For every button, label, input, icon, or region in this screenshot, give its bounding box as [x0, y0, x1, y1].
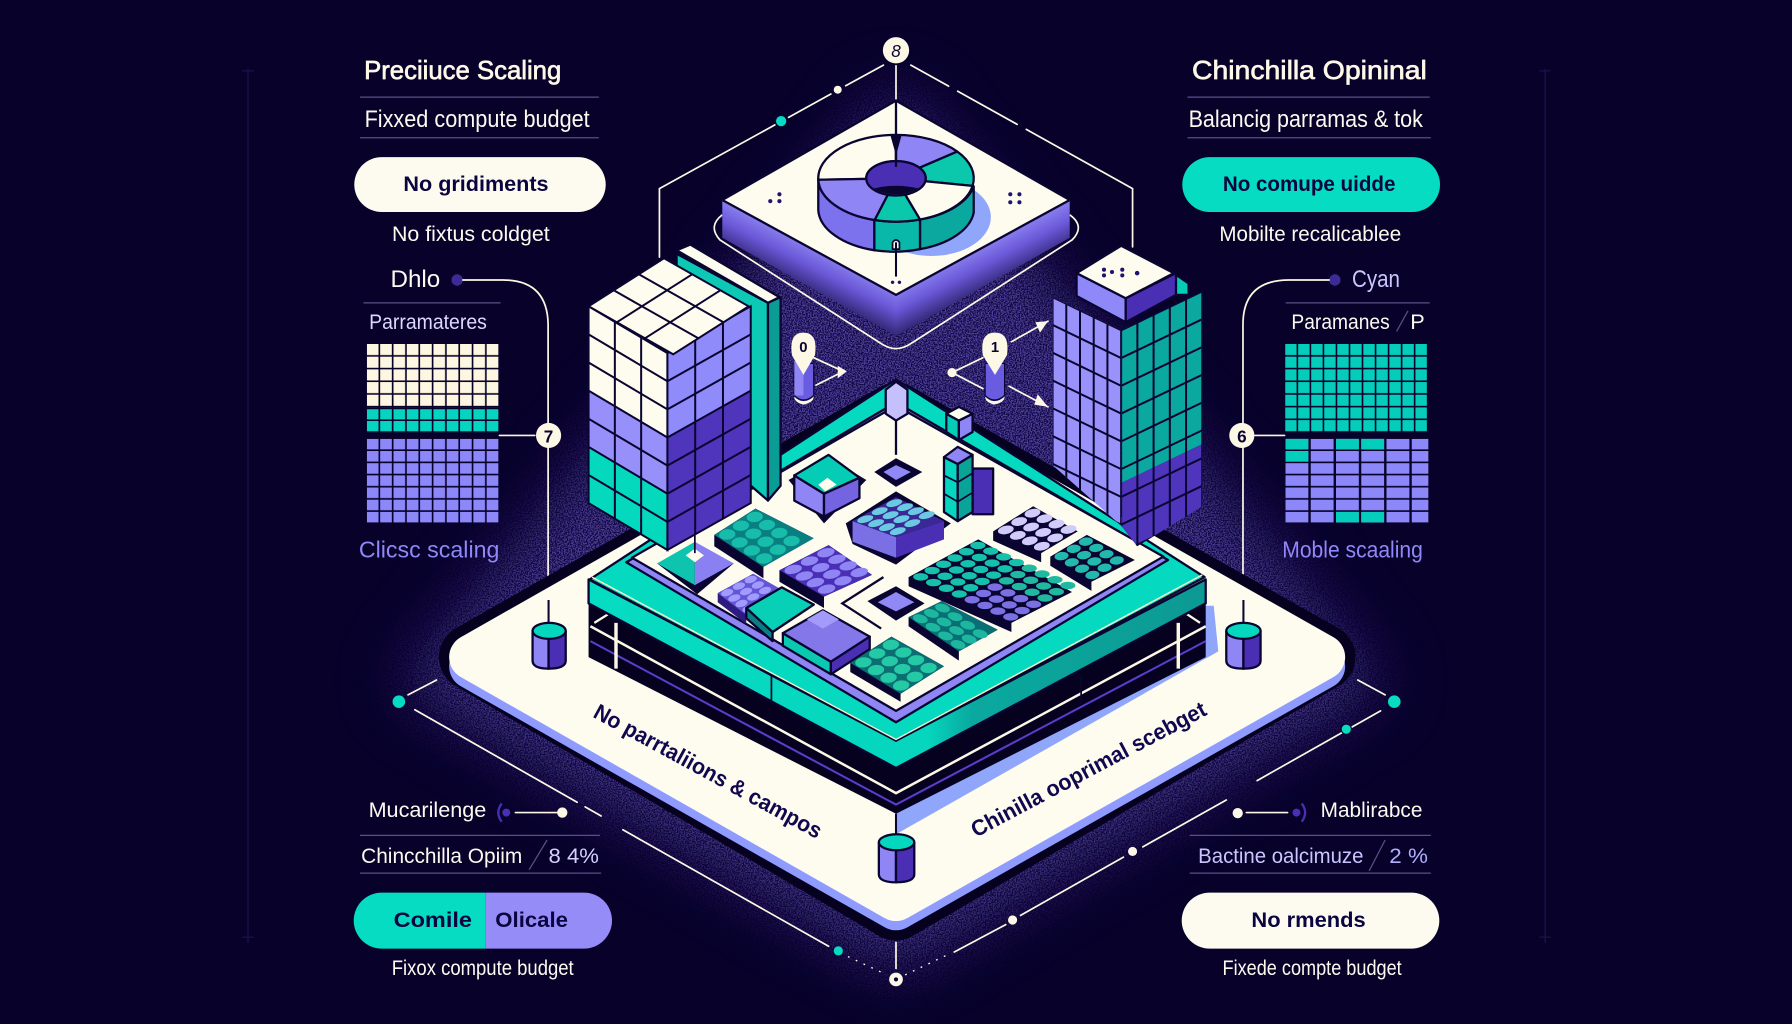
callout 1 pin with arrows: 1	[991, 340, 999, 356]
waffle grid: left	[367, 344, 500, 524]
platform top	[722, 101, 1070, 295]
platform outline	[714, 215, 1078, 349]
title: chinchilla optimal: Chinchilla Opininal	[1192, 55, 1427, 85]
platform label: left edge: No parrtaliions & campos	[590, 699, 826, 844]
stage: teal platform	[589, 379, 1206, 768]
label: Mablirabce	[1321, 797, 1422, 822]
caption: right pill: Mobilte recalicablee	[1219, 221, 1401, 246]
pill: no compute guide	[1182, 157, 1440, 212]
callout 0 pin: 0	[799, 340, 808, 356]
cylinder: left	[533, 600, 566, 669]
right tower	[1052, 247, 1202, 546]
callout 8 with connectors: 8	[891, 41, 901, 61]
panel: top right heading	[1187, 55, 1431, 138]
platform label: right edge: Chinilla ooprimal scebget	[967, 696, 1211, 842]
panel: left parameters	[359, 266, 561, 587]
left tower	[589, 245, 781, 550]
chip: mixed array K	[1050, 535, 1135, 591]
chip: teal blocks H	[909, 601, 998, 661]
label: parameters: Parramateres	[369, 309, 487, 334]
cylinder: bottom	[879, 814, 914, 882]
block on top of tower	[1077, 246, 1189, 322]
donut shadow	[872, 178, 991, 256]
tower: left face	[1053, 297, 1121, 552]
top platform with donut chart	[714, 99, 1078, 349]
chip: lavender array C	[718, 574, 782, 624]
label: multi-range: Mucarilenge	[369, 797, 486, 822]
tower: top face	[589, 258, 749, 354]
pill: compile / oblique: Comile	[394, 909, 472, 932]
chip: small square N	[874, 458, 922, 487]
connector: lower right with nodes	[905, 680, 1401, 975]
cylinder: right	[1226, 600, 1261, 669]
tower: right face	[1121, 292, 1202, 546]
title: precise scaling: Preciiuce Scaling	[364, 55, 561, 85]
panel: bottom right	[1190, 797, 1431, 873]
connector: left: 7	[544, 426, 553, 446]
chip: small processor G	[867, 586, 925, 621]
panel: bottom left: 8 4%	[549, 843, 599, 868]
panel: bottom right: 2 %	[1389, 843, 1428, 868]
stat: 2 percent: Bactine oalcimuze	[1198, 843, 1363, 868]
donut chart	[818, 135, 974, 252]
panel: right parameters: P	[1410, 309, 1425, 334]
lower pointer	[893, 240, 899, 249]
subtitle: Balancig parramas & tok	[1189, 106, 1424, 133]
pill: no rmends	[1182, 893, 1439, 949]
chip: pyramid block	[657, 520, 734, 594]
stat: 84 percent: Chincchilla Opiim	[361, 843, 522, 868]
stage: tray	[626, 382, 1168, 722]
background glow	[389, 80, 1394, 971]
callout 1 pin with arrows	[947, 321, 1048, 407]
panel: base platform	[472, 416, 1322, 907]
pill: compile / oblique	[354, 893, 612, 949]
stage understructure	[589, 603, 1206, 814]
tower: left face	[589, 306, 667, 550]
panel: bottom left	[360, 797, 601, 873]
legend connector	[1233, 803, 1305, 822]
pill: no compute guide: No comupe uidde	[1223, 173, 1396, 196]
connector: right	[1229, 274, 1341, 587]
chip: teal textured F	[850, 637, 944, 702]
small cube	[946, 407, 973, 440]
chip: pillar array L	[846, 491, 951, 565]
pill: compile / oblique: Olicale	[495, 909, 568, 932]
teal stack O	[944, 447, 993, 521]
small dots	[768, 192, 1021, 284]
connector: left	[451, 274, 561, 587]
bottom node	[889, 942, 903, 986]
label: cyan: Cyan	[1352, 266, 1400, 293]
label: classic scaling: Clicsc scaling	[359, 537, 499, 563]
chip: teal block D	[746, 587, 814, 641]
label: parameters: Paramanes	[1291, 309, 1390, 334]
connector: right: 6	[1237, 426, 1247, 446]
caption: bottom left: Fixox compute budget	[392, 955, 574, 980]
chip: large array I	[909, 539, 1079, 632]
label: mobile scaling: Moble scaaling	[1282, 537, 1423, 563]
teal slab	[677, 245, 781, 501]
chip: light array J	[993, 506, 1080, 562]
platform sides	[722, 200, 896, 336]
infographic canvas	[242, 37, 1551, 1002]
pill: no rmends: No rmends	[1251, 909, 1366, 932]
panel: right parameters	[1229, 266, 1430, 587]
callout 0 pin	[791, 333, 847, 405]
callout 8 with connectors	[659, 37, 1133, 257]
caption: left pill: No fixtus coldget	[392, 221, 550, 246]
side tick rails	[242, 69, 1551, 943]
tower: right face	[667, 306, 751, 550]
pill: no gradients: No gridiments	[403, 173, 549, 196]
center pointer	[895, 99, 897, 167]
shadow: right side of stage	[896, 606, 1218, 834]
waffle grid: right	[1285, 344, 1428, 524]
caption: bottom right: Fixede compte budget	[1223, 955, 1402, 980]
connector: lower left with nodes	[393, 680, 887, 975]
pill: no gradients	[354, 157, 606, 212]
label: dhlo: Dhlo	[391, 266, 440, 293]
panel: top left heading	[360, 55, 599, 138]
chip: lavender array B	[779, 545, 872, 608]
legend connector	[498, 803, 567, 822]
chip: lavender block E	[783, 610, 870, 674]
chip: teal array A	[714, 509, 814, 578]
subtitle: Fixxed compute budget	[365, 106, 590, 133]
cube M	[789, 455, 866, 523]
